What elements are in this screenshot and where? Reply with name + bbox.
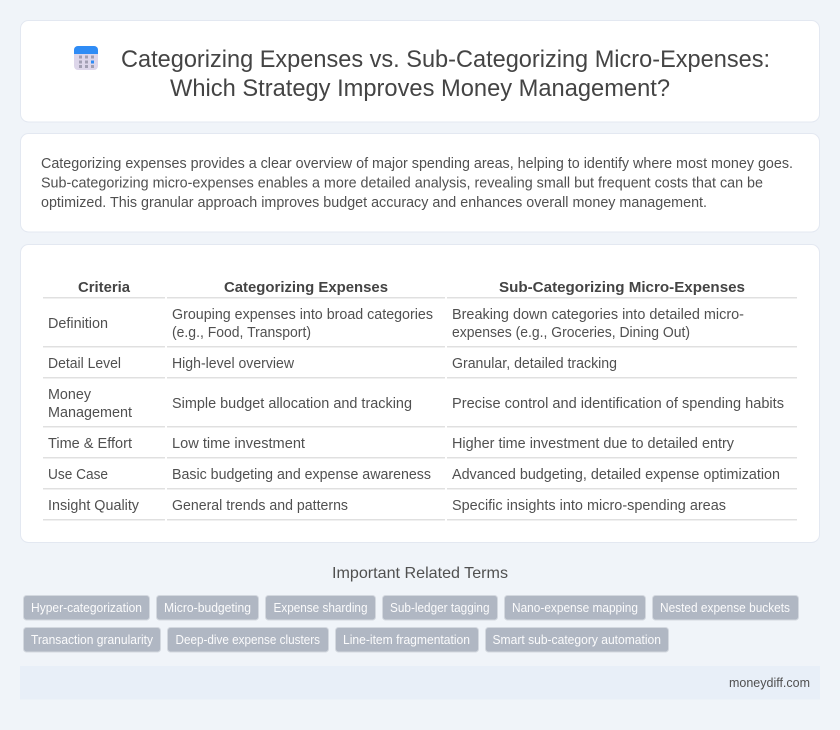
row: detail level [48, 356, 617, 372]
tag: Expense sharding [274, 601, 368, 615]
row: definition: Grouping expenses into broad categories [172, 307, 433, 323]
tag: Smart sub-category automation [492, 633, 661, 647]
row: use case [48, 467, 780, 483]
row: time and effort: Higher time investment due to detailed entry [452, 436, 735, 452]
panel: description [20, 134, 820, 232]
row: time and effort [48, 436, 735, 452]
table header row: Categorizing Expenses [224, 279, 388, 296]
row: money management [48, 387, 784, 421]
tag [486, 628, 668, 652]
footer [20, 666, 820, 700]
row: money management: Precise control and identification of spending habits [452, 396, 784, 412]
heading: related terms: Important Related Terms [332, 565, 508, 582]
table header row: Criteria [78, 279, 131, 296]
tag: Micro-budgeting [164, 601, 251, 615]
table header row [78, 279, 745, 296]
tag [336, 628, 478, 652]
tag [382, 596, 498, 620]
tag: Deep-dive expense clusters [176, 633, 320, 647]
row: detail level: Granular, detailed tracking [452, 356, 617, 372]
tag: Transaction granularity [31, 633, 154, 647]
related term tags [24, 596, 798, 652]
table header row: Sub-Categorizing Micro-Expenses [499, 279, 745, 296]
row: definition [48, 307, 744, 341]
footer: moneydiff.com [729, 675, 810, 690]
title: Categorizing Expenses vs. Sub-Categorizing Micro-Expenses: [121, 46, 770, 73]
row: insight quality: Specific insights into micro-spending areas [452, 498, 726, 514]
tag: Line-item fragmentation [343, 633, 470, 647]
text block: description: optimized. This granular approach improves budget accuracy and enhances overall money management. [41, 194, 707, 211]
title [121, 46, 770, 102]
text block: description: Sub-categorizing micro-expenses enables a more detailed analysis, revealing small but frequent costs that can be [41, 174, 763, 192]
row: insight quality: General trends and patterns [172, 498, 348, 514]
tag [156, 596, 258, 620]
row: money management: Simple budget allocation and tracking [172, 396, 412, 412]
title: Which Strategy Improves Money Management? [170, 75, 670, 102]
row: detail level: Detail Level [48, 356, 121, 372]
row: use case: Advanced budgeting, detailed expense optimization [452, 467, 780, 483]
row: definition: Breaking down categories into detailed micro- [452, 307, 744, 323]
tag: Sub-ledger tagging [390, 601, 490, 615]
panel: header [20, 20, 820, 122]
row: definition: Definition [48, 316, 108, 332]
row: definition: expenses (e.g., Groceries, Dining Out) [452, 325, 690, 341]
row: insight quality [48, 498, 726, 514]
row: definition: (e.g., Food, Transport) [172, 325, 311, 341]
tag: Hyper-categorization [31, 601, 142, 615]
tag [24, 628, 160, 652]
row: time and effort: Time & Effort [48, 436, 132, 452]
row: use case: Basic budgeting and expense awareness [172, 467, 431, 483]
row: use case: Use Case [48, 467, 108, 483]
row: money management: Management [48, 405, 132, 421]
text block: description: Categorizing expenses provides a clear overview of major spending areas, helping to identify where most money goes. [41, 155, 793, 172]
tag [24, 596, 150, 620]
tag [652, 596, 798, 620]
row: money management: Money [48, 387, 92, 403]
row: insight quality: Insight Quality [48, 498, 140, 514]
text block: description [41, 155, 793, 211]
icon: calendar [74, 46, 98, 70]
tag [504, 596, 646, 620]
tag: Nested expense buckets [660, 601, 790, 615]
tag: Nano-expense mapping [512, 601, 638, 615]
tag [266, 596, 376, 620]
tag [168, 628, 328, 652]
row: time and effort: Low time investment [172, 436, 305, 452]
row: detail level: High-level overview [172, 356, 294, 372]
panel: comparison table [20, 244, 820, 542]
